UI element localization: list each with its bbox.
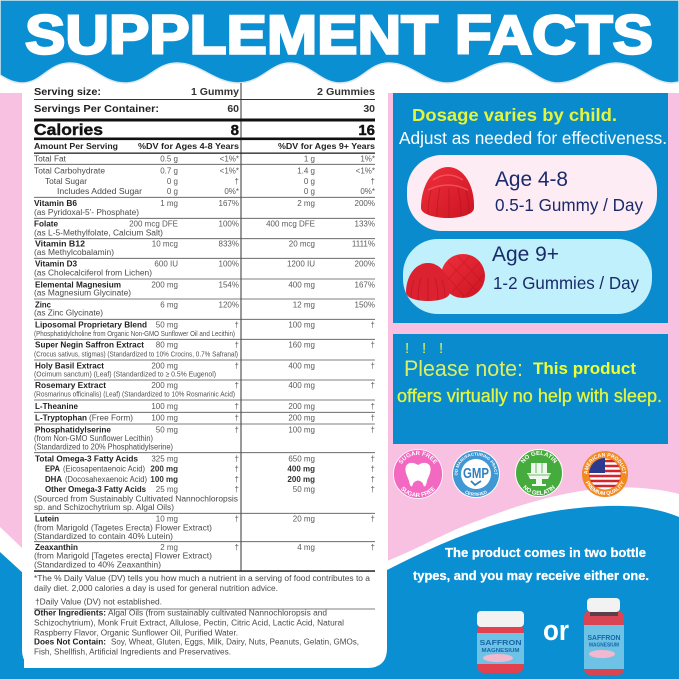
row: rosemary: † bbox=[371, 381, 375, 390]
row: total sugar: † bbox=[371, 177, 375, 186]
pink backdrop: right column bbox=[388, 93, 679, 573]
row: zeaxanthin: † bbox=[371, 543, 375, 552]
row: liposomal blend: Liposomal Proprietary Blend bbox=[35, 321, 147, 330]
bottom right blue swoosh bbox=[360, 506, 679, 679]
row: total omega-3: 325 mg bbox=[151, 455, 178, 464]
row: holy basil: (Ocimum sanctum) (Leaf) (Standardized to ≥ 0.5% Eugenol) bbox=[34, 370, 216, 379]
row: DHA: 100 mg bbox=[150, 475, 178, 484]
badge: american product: AMERICAN PRODUCT bbox=[584, 452, 626, 474]
row: phosphatidylserine bbox=[34, 425, 375, 451]
badge: no gelatin: NO GELATIN bbox=[523, 485, 555, 495]
row: amount per serving: Amount Per Serving bbox=[34, 142, 118, 151]
title: SUPPLEMENT FACTS bbox=[25, 4, 653, 66]
row: zinc: 120% bbox=[219, 300, 239, 309]
text: does not contain bbox=[34, 637, 359, 656]
text: this product: This product bbox=[533, 360, 637, 378]
row: saffron extract: Super Negin Saffron Extract bbox=[35, 341, 144, 350]
icon: wide bottle bbox=[477, 611, 524, 673]
row: zinc: 12 mg bbox=[293, 300, 315, 309]
row: vitamin D3: 600 IU bbox=[154, 260, 178, 269]
row: other omega-3: † bbox=[371, 485, 375, 494]
text: other ingredients: Other Ingredients: bbox=[34, 609, 106, 618]
row: zeaxanthin: † bbox=[235, 543, 239, 552]
row: L-tryptophan: † bbox=[235, 414, 239, 423]
row: serving size bbox=[34, 86, 375, 98]
text: other ingredients: Algal Oils (from sustainably cultivated Nannochloropsis and bbox=[108, 609, 327, 618]
panel: please note bbox=[393, 334, 668, 444]
row: L-tryptophan: † bbox=[371, 414, 375, 423]
row: vitamin B6: 167% bbox=[219, 199, 239, 208]
row: vitamin B12: 833% bbox=[219, 240, 239, 249]
panel: supplement facts table bbox=[34, 83, 376, 656]
row: vitamin B6: 2 mg bbox=[297, 199, 315, 208]
row: phosphatidylserine: (Standardized to 20% Phosphatidylserine) bbox=[34, 442, 173, 451]
row: L-theanine: L-Theanine bbox=[35, 402, 79, 411]
row: total fat: 0.5 g bbox=[160, 155, 178, 164]
bottom right blue swoosh: white edge bbox=[387, 487, 679, 600]
row: liposomal blend bbox=[34, 321, 375, 338]
row: phosphatidylserine: Phosphatidylserine bbox=[35, 425, 112, 434]
row: folate: Folate bbox=[34, 220, 59, 229]
badge: GMP: GMP bbox=[463, 466, 489, 482]
row: vitamin D3: Vitamin D3 bbox=[35, 260, 78, 269]
row: L-theanine: † bbox=[371, 402, 375, 411]
heading: dosage varies: Dosage varies by child. bbox=[412, 105, 617, 125]
row: folate bbox=[34, 220, 375, 237]
row: phosphatidylserine: † bbox=[235, 425, 239, 434]
row: lutein: 10 mg bbox=[156, 515, 178, 524]
row: amount per serving bbox=[34, 142, 376, 151]
row: EPA: 200 mg bbox=[150, 465, 178, 474]
row: lutein: (from Marigold (Tagetes Erecta) Flower Extract) bbox=[34, 524, 212, 533]
row: total fat: Total Fat bbox=[34, 155, 67, 164]
row: elemental magnesium: (as Magnesium Glycinate) bbox=[34, 289, 131, 298]
row: servings per container: 60 bbox=[227, 103, 239, 115]
row: DHA: † bbox=[371, 475, 375, 484]
row: saffron extract: 160 mg bbox=[288, 341, 315, 350]
row: servings per container: Servings Per Container: bbox=[34, 103, 159, 115]
header wave band bbox=[0, 0, 679, 83]
badge: american product: PREMIUM QUALITY bbox=[586, 480, 624, 496]
row: folate: (as L-5-Methylfolate, Calcium Salt) bbox=[34, 228, 163, 237]
row: total sugar: 0 g bbox=[167, 177, 178, 186]
row: total carbohydrate: <1%* bbox=[220, 167, 239, 176]
row: liposomal blend: † bbox=[371, 321, 375, 330]
row: folate: 200 mcg DFE bbox=[129, 220, 178, 229]
row: vitamin B12: 10 mcg bbox=[152, 240, 178, 249]
text: does not contain: Fish, Shellfish, Artificial Ingredients and Preservatives. bbox=[34, 647, 231, 656]
row: total sugar bbox=[45, 177, 375, 186]
text: dagger footnote: †Daily Value (DV) not established. bbox=[35, 597, 162, 606]
pill: age 9+ bbox=[403, 239, 652, 314]
row: total omega-3 bbox=[35, 455, 375, 464]
row: other omega-3: † bbox=[235, 485, 239, 494]
row: vitamin D3: 1200 IU bbox=[287, 260, 315, 269]
row: added sugar: 0 g bbox=[167, 187, 178, 196]
row: rosemary: † bbox=[235, 381, 239, 390]
row: servings per container bbox=[34, 103, 375, 115]
row: vitamin D3 bbox=[34, 260, 375, 278]
row: EPA: † bbox=[235, 465, 239, 474]
row: zinc: Zinc bbox=[35, 300, 52, 309]
row: folate: 100% bbox=[219, 220, 239, 229]
row: saffron extract: † bbox=[235, 341, 239, 350]
row: phosphatidylserine: 50 mg bbox=[156, 425, 178, 434]
row: zeaxanthin: Zeaxanthin bbox=[35, 543, 78, 552]
badge: no gelatin: NO GELATIN bbox=[520, 450, 558, 464]
row: total fat: 1 g bbox=[304, 155, 315, 164]
row: total fat: 1%* bbox=[360, 155, 375, 164]
row: total fat: <1%* bbox=[220, 155, 239, 164]
badge: sugar free: SUGAR FREE bbox=[401, 486, 436, 497]
row: calories: 8 bbox=[231, 122, 239, 139]
row: zeaxanthin: 2 mg bbox=[160, 543, 178, 552]
row: EPA bbox=[45, 465, 375, 474]
row: lutein: † bbox=[235, 515, 239, 524]
row: lutein: † bbox=[371, 515, 375, 524]
text: other ingredients: Raspberry Flavor, Organic Sunflower Oil, Purified Water. bbox=[34, 629, 238, 638]
text: omega-3 source: (Sourced from Sustainably Cultivated Nannochloropsis bbox=[34, 495, 238, 504]
row: vitamin B12: (as Methylcobalamin) bbox=[34, 248, 114, 257]
row: saffron extract: (Crocus sativus, stigmas) (Standardized to 10% Crocins, 0.7% Safranal) bbox=[34, 350, 238, 359]
row: zinc: (as Zinc Glycinate) bbox=[34, 309, 103, 318]
badge: GMP: CERTIFIED bbox=[465, 490, 487, 496]
row: DHA: (Docosahexaenoic Acid) bbox=[65, 475, 147, 484]
icon: exclamation marks: !!! bbox=[405, 340, 443, 357]
row: lutein bbox=[34, 515, 375, 541]
row: calories: Calories bbox=[34, 122, 103, 139]
row: other omega-3: 50 mg bbox=[293, 485, 315, 494]
row: vitamin B12: 20 mcg bbox=[289, 240, 315, 249]
row: DHA bbox=[45, 475, 375, 484]
row: total carbohydrate: 0.7 g bbox=[160, 167, 178, 176]
row: total sugar: 0 g bbox=[304, 177, 315, 186]
row: amount per serving: %DV for Ages 9+ Years bbox=[278, 142, 376, 151]
row: folate: 133% bbox=[355, 220, 375, 229]
row: liposomal blend: † bbox=[235, 321, 239, 330]
icon: tall bottle: MAGNESIUM bbox=[589, 642, 619, 648]
row: zeaxanthin bbox=[34, 543, 375, 569]
row: holy basil: 200 mg bbox=[151, 361, 178, 370]
badge: no gelatin bbox=[515, 449, 563, 497]
row: elemental magnesium: Elemental Magnesium bbox=[35, 280, 121, 289]
row: elemental magnesium: 167% bbox=[355, 280, 375, 289]
row: DHA: DHA bbox=[45, 475, 62, 484]
row: saffron extract: 80 mg bbox=[156, 341, 178, 350]
row: zinc: 150% bbox=[355, 300, 375, 309]
row: L-theanine: † bbox=[235, 402, 239, 411]
row: vitamin B12: Vitamin B12 bbox=[35, 240, 86, 249]
text: two bottle types: The product comes in two bottle bbox=[445, 545, 646, 560]
badge: GMP: GOOD MANUFACTURING PRACTICE bbox=[454, 452, 498, 476]
white table panel bottom bbox=[22, 540, 387, 668]
row: elemental magnesium: 400 mg bbox=[288, 280, 315, 289]
text: daily value footnote: daily diet. 2,000 calories a day is used for general nutrition advice. bbox=[34, 584, 278, 593]
icon: wide bottle: MAGNESIUM bbox=[482, 648, 520, 654]
row: rosemary: 400 mg bbox=[288, 381, 315, 390]
row: holy basil: † bbox=[371, 361, 375, 370]
row: L-theanine: 100 mg bbox=[151, 402, 178, 411]
icon: tall bottle: SAFFRON bbox=[588, 635, 620, 642]
row: added sugar bbox=[57, 187, 375, 196]
row: zeaxanthin: (Standardized to 40% Zeaxanthin) bbox=[34, 560, 161, 569]
row: L-theanine bbox=[35, 402, 375, 411]
row: serving size: Serving size: bbox=[34, 86, 101, 98]
badge: GMP bbox=[452, 450, 500, 498]
row: calories: 16 bbox=[358, 122, 375, 139]
row: other omega-3 bbox=[45, 485, 375, 494]
row: lutein: (Standardized to contain 40% Lutein) bbox=[34, 532, 173, 541]
row: holy basil: † bbox=[235, 361, 239, 370]
text: gummies per day: 1-2 Gummies / Day bbox=[493, 273, 639, 293]
row: zeaxanthin: 4 mg bbox=[297, 543, 315, 552]
row: total omega-3: 650 mg bbox=[288, 455, 315, 464]
row: EPA: † bbox=[371, 465, 375, 474]
row: L-theanine: 200 mg bbox=[288, 402, 315, 411]
row: rosemary: 200 mg bbox=[151, 381, 178, 390]
text: other ingredients bbox=[34, 609, 344, 638]
text: please note: Please note: bbox=[404, 356, 523, 381]
row: zinc: 6 mg bbox=[160, 300, 178, 309]
row: total carbohydrate bbox=[34, 167, 375, 176]
row: rosemary bbox=[34, 381, 375, 399]
row: added sugar: 0%* bbox=[360, 187, 375, 196]
row: total omega-3: Total Omega-3 Fatty Acids bbox=[35, 455, 139, 464]
panel: dosage bbox=[393, 93, 668, 323]
row: zinc bbox=[34, 300, 375, 318]
row: vitamin B6: Vitamin B6 bbox=[34, 199, 78, 208]
row: total carbohydrate: <1%* bbox=[356, 167, 375, 176]
row: added sugar: Includes Added Sugar bbox=[57, 187, 142, 196]
row: liposomal blend: 100 mg bbox=[288, 321, 315, 330]
row: liposomal blend: 50 mg bbox=[156, 321, 178, 330]
text: other ingredients: Schizochytrium), Monk Fruit Extract, Allulose, Pectin, Citric Acid, Lactic Acid, Natural bbox=[34, 619, 344, 628]
row: elemental magnesium: 154% bbox=[219, 280, 239, 289]
row: lutein: Lutein bbox=[35, 515, 59, 524]
row: amount per serving: %DV for Ages 4-8 Years bbox=[138, 142, 240, 151]
text: age 9+: Age 9+ bbox=[492, 243, 559, 266]
row: added sugar: 0%* bbox=[224, 187, 239, 196]
text: gummy per day: 0.5-1 Gummy / Day bbox=[495, 195, 643, 215]
row: vitamin D3: 100% bbox=[219, 260, 239, 269]
row: elemental magnesium bbox=[34, 280, 375, 298]
row: holy basil bbox=[34, 361, 375, 379]
row: total omega-3: † bbox=[235, 455, 239, 464]
badge: american product bbox=[582, 451, 628, 497]
row: DHA: † bbox=[235, 475, 239, 484]
text: daily value footnote: *The % Daily Value (DV) tells you how much a nutrient in a serving of food contributes to a bbox=[34, 574, 371, 583]
row: vitamin B6: 200% bbox=[355, 199, 375, 208]
row: phosphatidylserine: † bbox=[371, 425, 375, 434]
row: elemental magnesium: 200 mg bbox=[151, 280, 178, 289]
text: or: or bbox=[543, 615, 569, 647]
row: rosemary: (Rosmarinus officinalis) (Leaf) (Standardized to 10% Rosmarinic Acid) bbox=[34, 390, 235, 399]
row: L-tryptophan: 200 mg bbox=[288, 414, 315, 423]
row: vitamin B6: 1 mg bbox=[160, 199, 178, 208]
row: EPA: EPA bbox=[45, 465, 60, 474]
row: phosphatidylserine: (from Non-GMO Sunflower Lecithin) bbox=[34, 434, 153, 443]
row: holy basil: Holy Basil Extract bbox=[35, 361, 104, 370]
row: serving size: 1 Gummy bbox=[191, 86, 239, 98]
row: L-tryptophan: (Free Form) bbox=[89, 414, 133, 423]
text: age 4-8: Age 4-8 bbox=[495, 168, 568, 191]
text: daily value footnote bbox=[34, 574, 371, 593]
bottom blue background bbox=[0, 552, 679, 679]
row: total carbohydrate: Total Carbohydrate bbox=[34, 167, 106, 176]
icon: gummy bbox=[421, 167, 474, 218]
text: omega-3 source: sp. and Schizochytrium sp. Algal Oils) bbox=[34, 503, 174, 512]
badge: sugar free: SUGAR FREE bbox=[398, 450, 438, 464]
text: does not contain: Does Not Contain: bbox=[34, 637, 106, 646]
row: serving size: 2 Gummies bbox=[317, 86, 375, 98]
text: two bottle types bbox=[413, 545, 649, 583]
text: omega-3 source bbox=[34, 495, 238, 512]
row: saffron extract: † bbox=[371, 341, 375, 350]
row: rosemary: Rosemary Extract bbox=[35, 381, 106, 390]
row: DHA: 200 mg bbox=[287, 475, 315, 484]
row: L-tryptophan: 100 mg bbox=[151, 414, 178, 423]
row: total omega-3: † bbox=[371, 455, 375, 464]
row: added sugar: 0 g bbox=[304, 187, 315, 196]
row: vitamin B12 bbox=[34, 240, 375, 257]
row: vitamin D3: 200% bbox=[355, 260, 375, 269]
row: holy basil: 400 mg bbox=[288, 361, 315, 370]
row: liposomal blend: (Phosphatidylcholine from Organic Non-GMO Sunflower Oil and Lecithin) bbox=[34, 329, 235, 338]
icon: wide bottle: SAFFRON bbox=[480, 638, 522, 647]
pink backdrop: left strip bbox=[0, 93, 22, 548]
text: does not contain: Soy, Wheat, Gluten, Eggs, Milk, Dairy, Nuts, Peanuts, Gelatin, GMOs, bbox=[111, 637, 359, 646]
row: vitamin B6 bbox=[34, 199, 375, 217]
text: sleep warning: offers virtually no help with sleep. bbox=[397, 386, 662, 406]
row: L-tryptophan: L-Tryptophan bbox=[35, 414, 87, 423]
row: total fat bbox=[34, 155, 375, 164]
row: saffron extract bbox=[34, 341, 375, 359]
row: servings per container: 30 bbox=[363, 103, 375, 115]
text: adjust as needed: Adjust as needed for effectiveness. bbox=[399, 128, 667, 148]
row: total sugar: † bbox=[235, 177, 239, 186]
row: phosphatidylserine: 100 mg bbox=[288, 425, 315, 434]
icon: tall bottle bbox=[584, 598, 624, 675]
row: EPA: (Eicosapentaenoic Acid) bbox=[63, 465, 145, 474]
row: vitamin B6: (as Pyridoxal-5'- Phosphate) bbox=[34, 208, 139, 217]
badge: sugar free bbox=[393, 449, 443, 499]
row: other omega-3: 25 mg bbox=[156, 485, 178, 494]
row: calories bbox=[34, 122, 375, 139]
row: EPA: 400 mg bbox=[287, 465, 315, 474]
row: L-tryptophan bbox=[35, 414, 375, 423]
text: two bottle types: types, and you may receive either one. bbox=[413, 568, 649, 583]
row: total sugar: Total Sugar bbox=[45, 177, 87, 186]
row: other omega-3: Other Omega-3 Fatty Acids bbox=[45, 485, 147, 494]
row: lutein: 20 mg bbox=[293, 515, 315, 524]
row: folate: 400 mcg DFE bbox=[266, 220, 315, 229]
row: vitamin B12: 1111% bbox=[352, 240, 375, 249]
row: zeaxanthin: (from Marigold [Tagetes erecta] Flower Extract) bbox=[34, 552, 212, 561]
icon: two gummies bbox=[406, 254, 485, 301]
row: total carbohydrate: 1.4 g bbox=[297, 167, 315, 176]
row: vitamin D3: (as Cholecalciferol from Lichen) bbox=[34, 269, 152, 278]
pill: age 4-8 bbox=[407, 155, 657, 231]
